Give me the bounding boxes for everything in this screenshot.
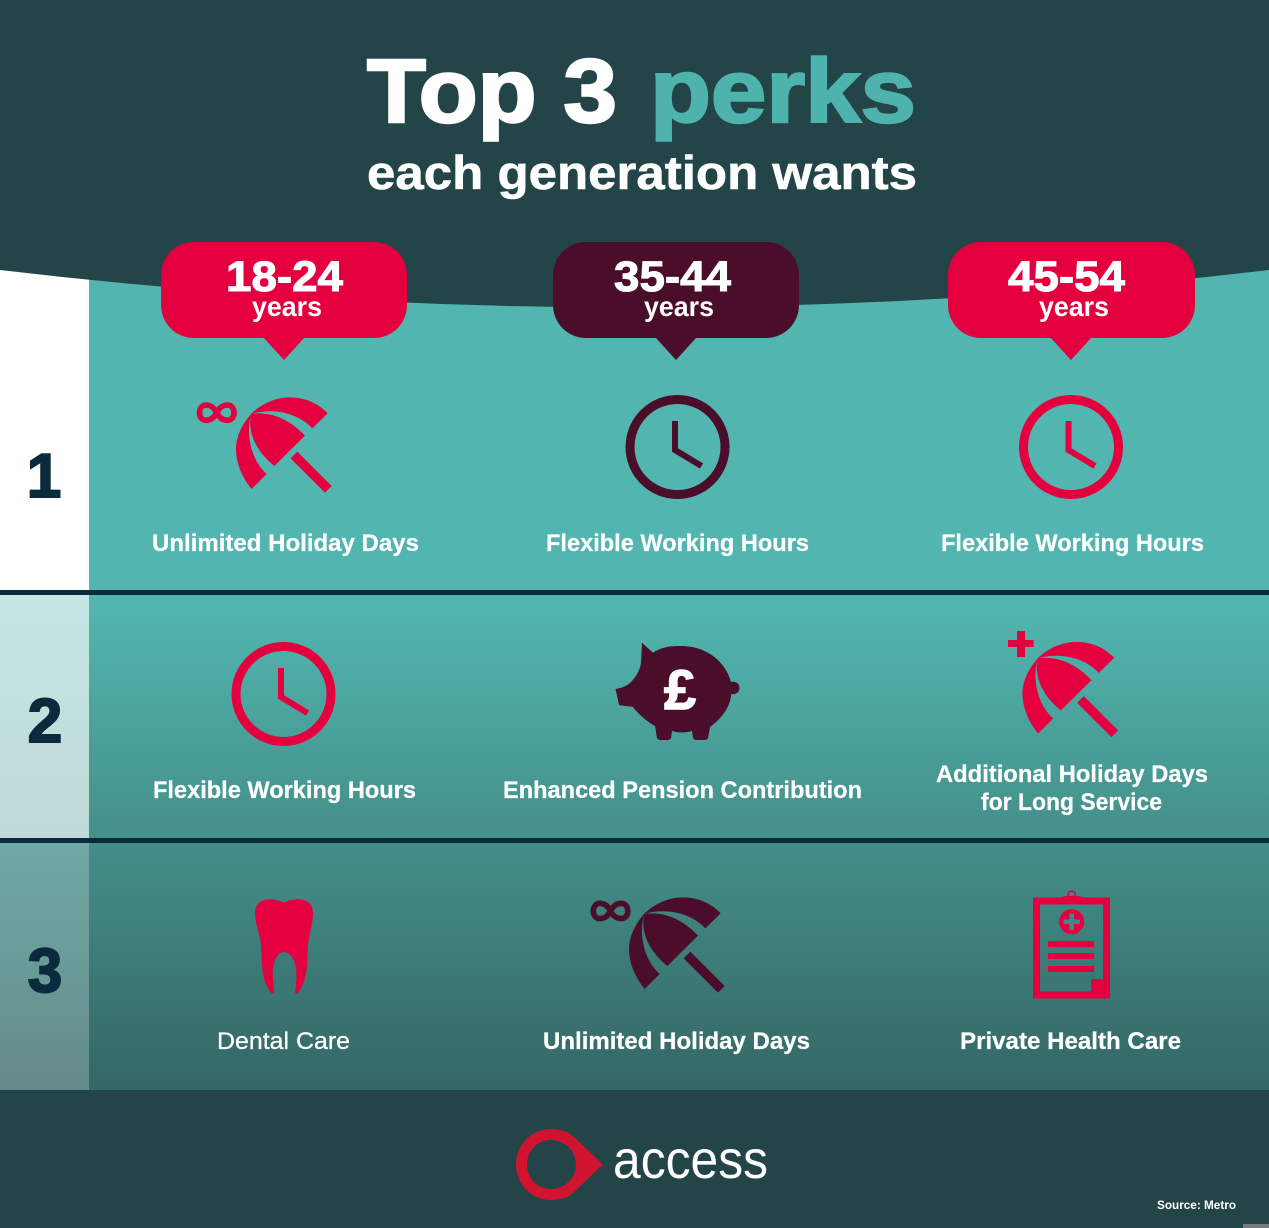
age badge: 45-54 years <box>948 242 1195 360</box>
label: Flexible Working Hours: Flexible Working Hours <box>153 777 416 804</box>
title: each generation wants <box>367 146 917 199</box>
rank number 2: 2 <box>28 687 62 756</box>
panel: rows 2 and 3 teal band <box>0 595 1269 1090</box>
icon: additional holiday umbrella with plus <box>1008 631 1118 737</box>
panel: row 1 teal band <box>89 260 1269 590</box>
age badge: 18-24 years: 18-24 <box>226 253 343 301</box>
label: Unlimited Holiday Days: Unlimited Holiday Days <box>543 1028 810 1055</box>
icon: unlimited holiday umbrella, maroon <box>593 897 725 993</box>
age badge: 45-54 years: 45-54 <box>1008 253 1125 301</box>
label: Flexible Working Hours: Flexible Working Hours <box>546 530 809 557</box>
label: Enhanced Pension Contribution: Enhanced Pension Contribution <box>503 777 862 804</box>
title: Top 3 <box>367 42 617 142</box>
age badge: 45-54 years: years <box>1039 291 1109 322</box>
age badge: 35-44 years <box>553 242 799 360</box>
icon: piggy bank with pound sign <box>616 643 740 740</box>
rank number 1: 1 <box>27 442 61 511</box>
panel: row 3 sidebar <box>0 843 89 1090</box>
rank number 3: 3 <box>28 937 62 1006</box>
label: Flexible Working Hours: Flexible Working Hours <box>941 530 1204 557</box>
icon: tooth <box>255 899 313 994</box>
label: Private Health Care: Private Health Care <box>960 1028 1181 1055</box>
icon: clock, red <box>1024 400 1118 494</box>
title <box>367 42 917 199</box>
title: perks <box>650 42 916 142</box>
age badge: 18-24 years: years <box>252 291 322 322</box>
icon: clock, maroon <box>630 400 725 494</box>
icon: piggy bank with pound sign: £ <box>664 658 696 721</box>
label: Dental Care: Dental Care <box>217 1028 350 1055</box>
age badge: 35-44 years: years <box>644 291 714 322</box>
panel: curved header background <box>0 0 1269 308</box>
logo: access: access <box>613 1130 768 1190</box>
label: Additional Holiday Days for Long Service: Additional Holiday Days <box>936 761 1208 788</box>
icon: unlimited holiday umbrella, red <box>200 397 332 493</box>
panel: footer <box>0 1090 1269 1228</box>
label: Unlimited Holiday Days: Unlimited Holiday Days <box>152 530 419 557</box>
age badge: 35-44 years: 35-44 <box>614 253 731 301</box>
panel: row 2 sidebar <box>0 595 89 838</box>
logo: access <box>516 1129 768 1200</box>
source note: Source: Metro <box>1157 1198 1236 1212</box>
label: Additional Holiday Days for Long Service <box>936 761 1208 816</box>
icon: medical clipboard <box>1036 891 1106 995</box>
age badge: 18-24 years <box>161 242 407 360</box>
icon: clock, red <box>236 646 331 742</box>
label: Additional Holiday Days for Long Service: for Long Service <box>981 789 1162 816</box>
